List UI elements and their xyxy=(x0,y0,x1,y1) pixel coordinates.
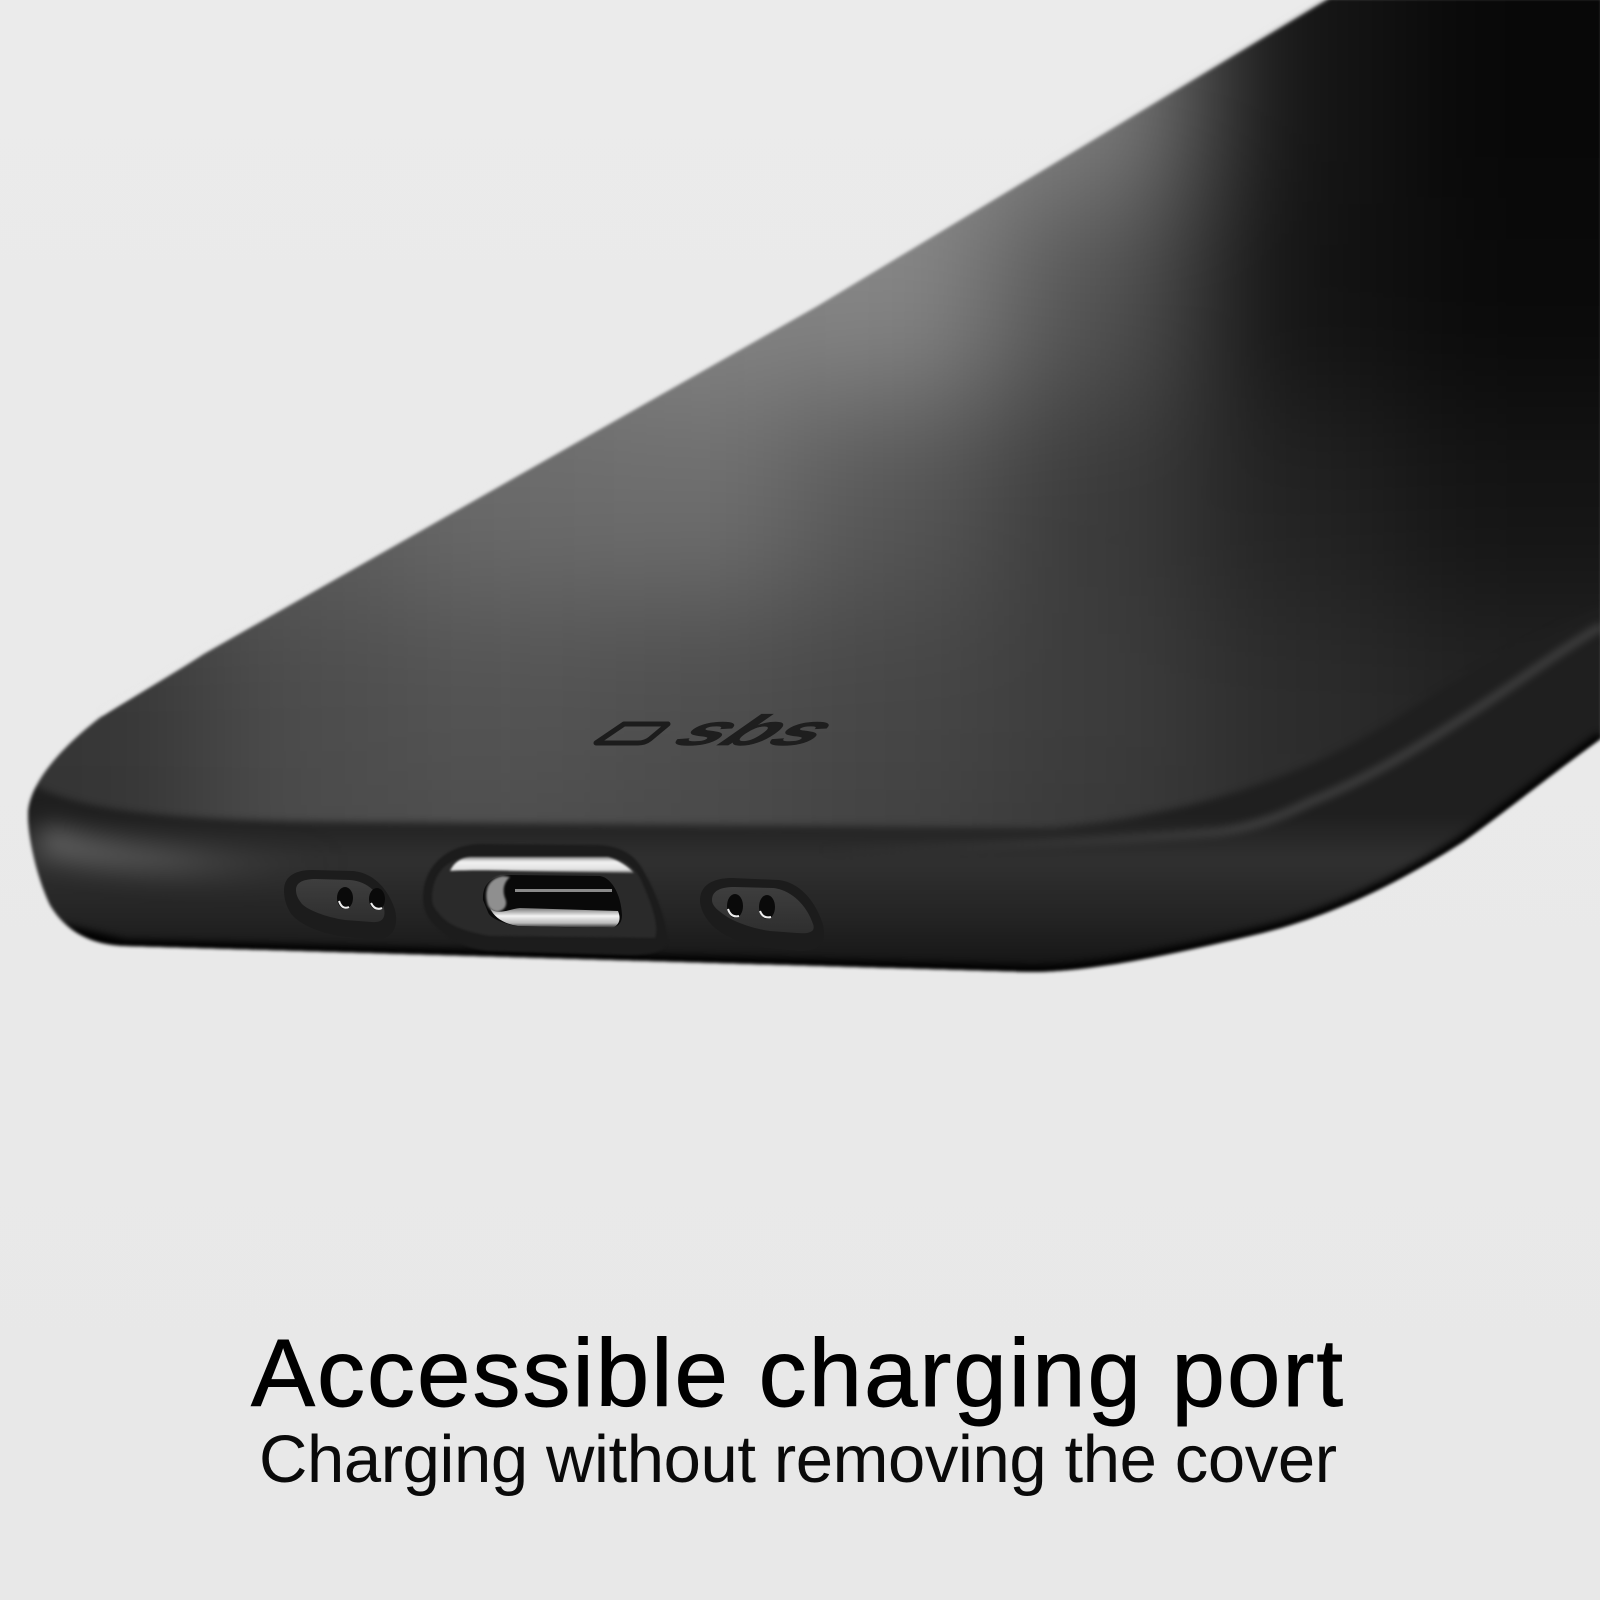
speaker hole left xyxy=(337,887,353,909)
speaker hole left xyxy=(727,894,743,918)
chrome bottom lip xyxy=(490,908,620,928)
grille inner surface xyxy=(712,887,814,933)
speaker hole right xyxy=(759,895,775,919)
logo square mark xyxy=(596,724,668,743)
port cutout rim xyxy=(423,844,667,955)
back panel tonal field xyxy=(34,0,1600,834)
usb-c opening xyxy=(483,875,622,928)
subheading: Charging without removing the cover xyxy=(259,1422,1337,1497)
chrome top bar xyxy=(450,857,634,873)
grille inner surface xyxy=(296,879,384,922)
right rim highlight xyxy=(1074,622,1600,842)
grille outer recess xyxy=(700,878,824,951)
charging port xyxy=(423,844,667,955)
grille outer recess xyxy=(284,870,396,939)
left speaker grille xyxy=(284,870,396,939)
chrome inner left wall xyxy=(486,876,510,912)
side band xyxy=(27,726,1424,968)
phone case xyxy=(25,0,1600,975)
logo wordmark: sbs xyxy=(654,707,861,754)
speaker hole right xyxy=(369,888,385,910)
sbs logo xyxy=(596,707,861,754)
usb-c contact tongue xyxy=(515,889,612,892)
port inner recess xyxy=(432,857,656,938)
right speaker grille xyxy=(700,878,824,951)
bottom shadow xyxy=(60,738,1600,972)
heading: Accessible charging port xyxy=(251,1320,1343,1427)
case body xyxy=(25,0,1600,975)
left rim highlight xyxy=(40,838,330,866)
